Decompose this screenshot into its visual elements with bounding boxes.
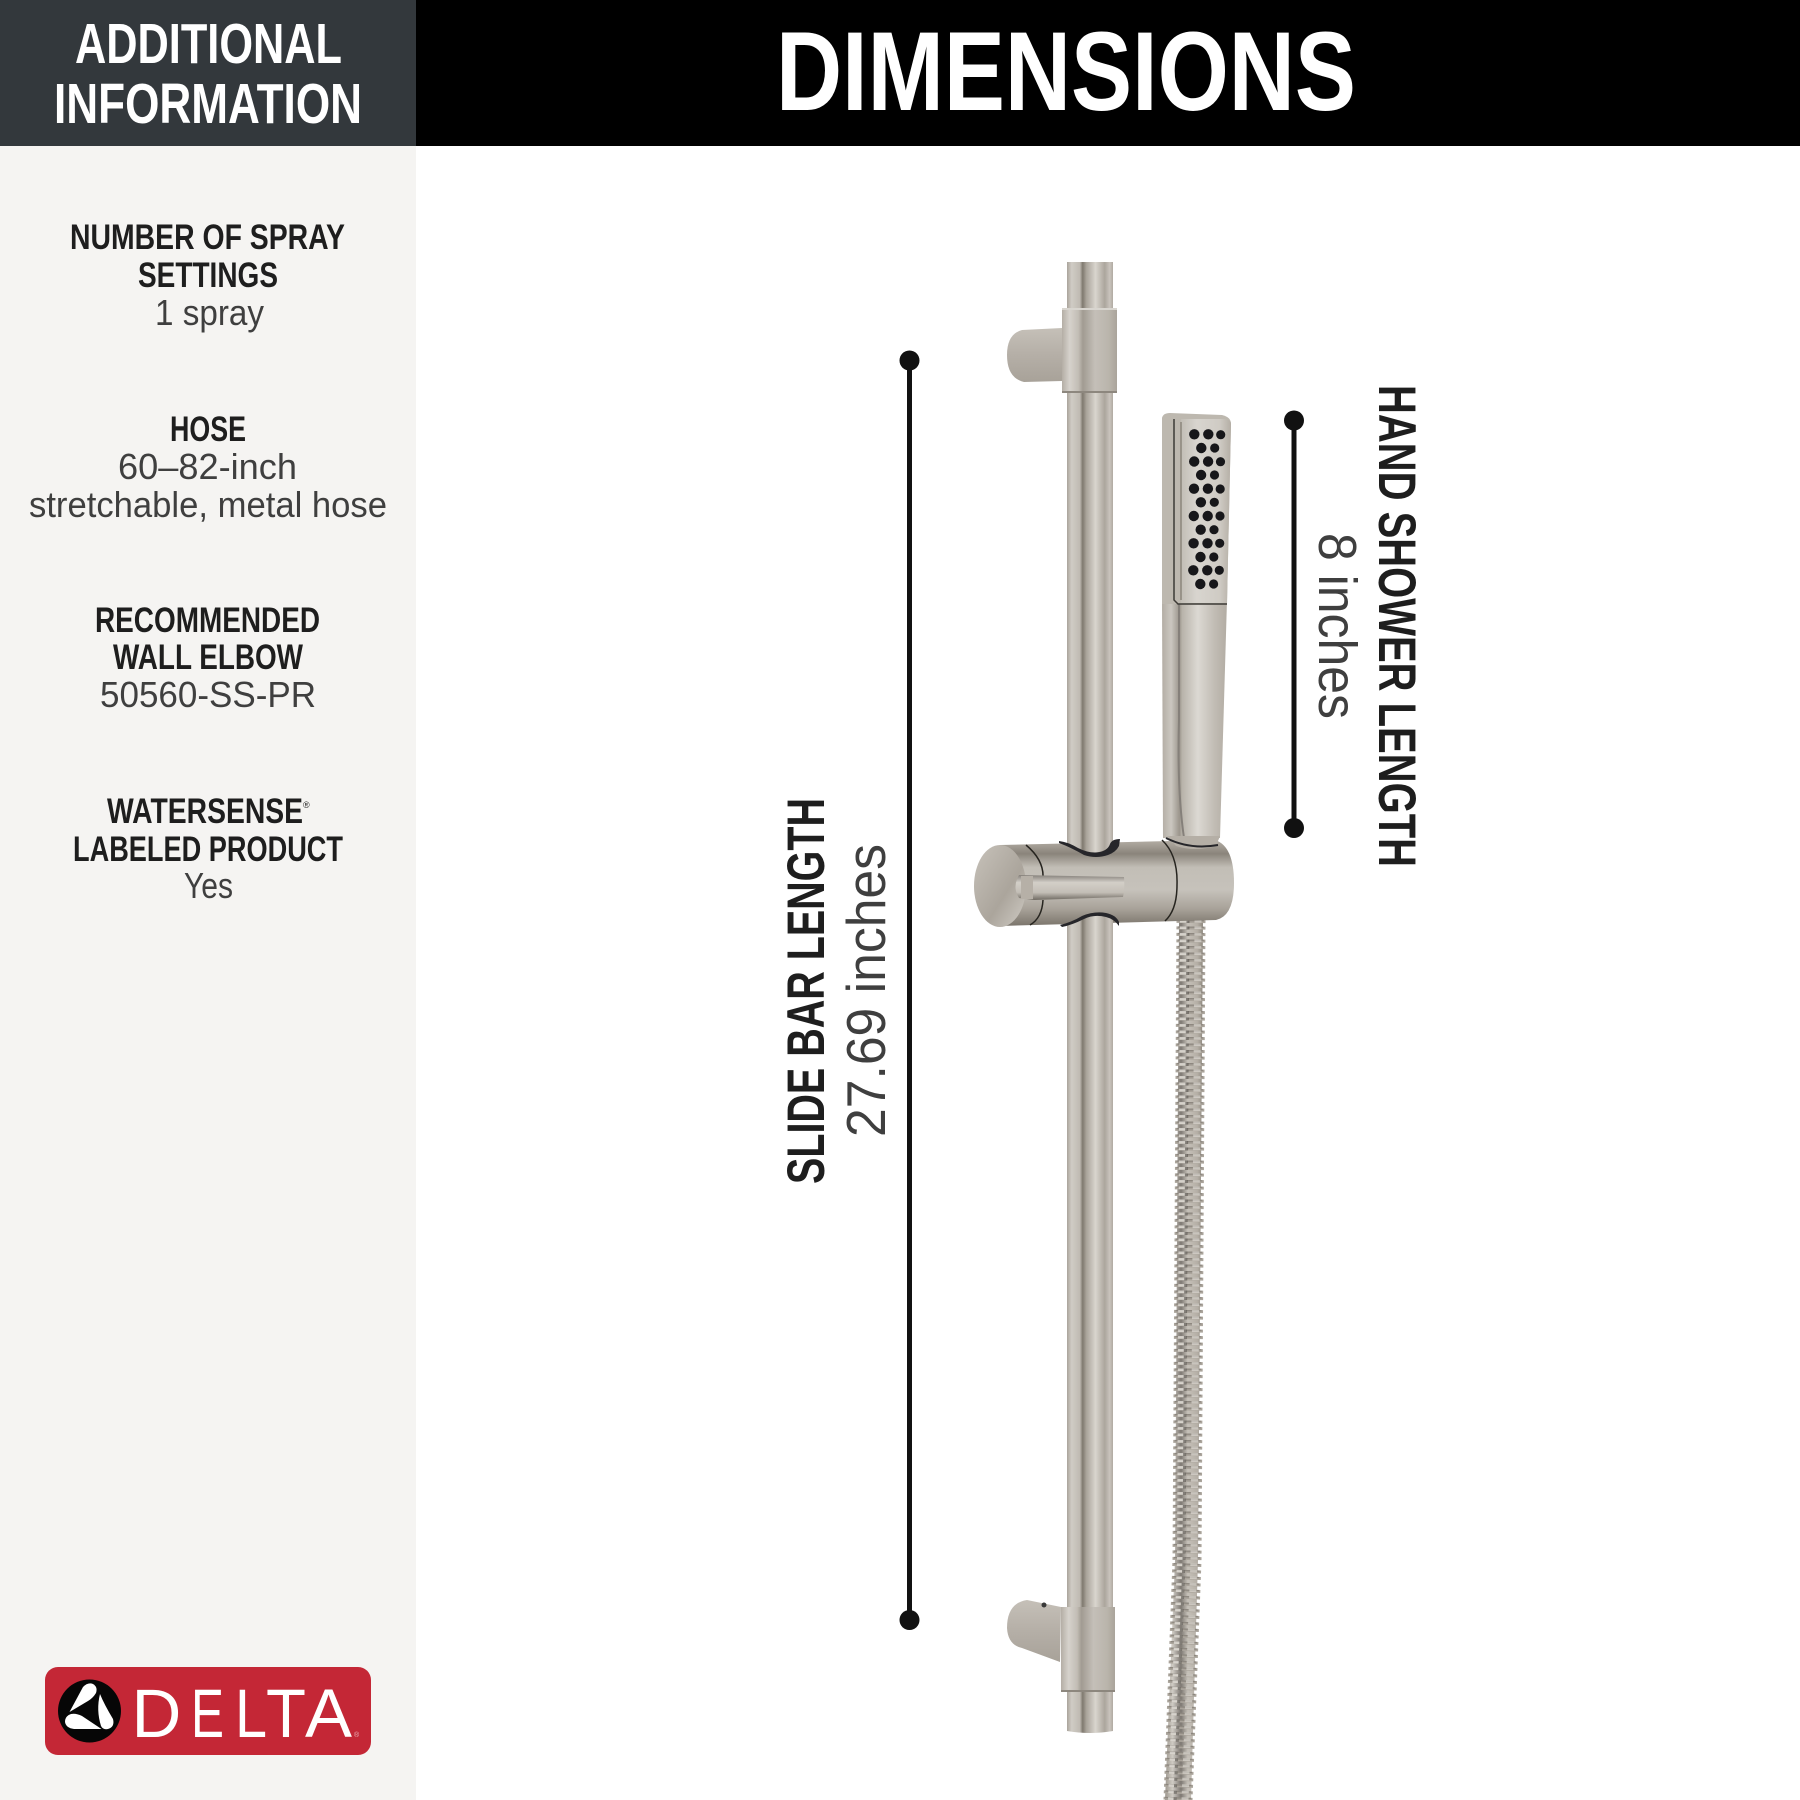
info block: hose	[29, 410, 387, 525]
product: upper wall bracket	[1007, 308, 1117, 393]
info block: watersense labeled product: Yes	[184, 865, 233, 906]
label: slide bar length: SLIDE BAR LENGTH	[777, 798, 836, 1184]
info block: recommended wall elbow: 50560-SS-PR	[100, 674, 316, 715]
product: metal hose	[1165, 920, 1203, 1800]
label: slide bar length: 27.69 inches	[835, 844, 897, 1137]
product: slide clamp	[974, 836, 1234, 928]
info block: recommended wall elbow	[95, 601, 320, 715]
info block: number of spray settings	[70, 218, 345, 333]
icon: spray nozzles	[1188, 429, 1225, 589]
panel: additional information sidebar	[0, 146, 416, 1800]
logo: delta: ®	[354, 1731, 360, 1739]
header: additional information	[0, 0, 416, 146]
logo: delta	[45, 1667, 371, 1755]
info block: number of spray settings: 1 spray	[155, 292, 264, 333]
logo: delta: T	[266, 1675, 306, 1752]
info block: hose: stretchable, metal hose	[29, 484, 387, 525]
dimension line: slide bar length	[900, 350, 920, 1630]
logo: delta: L	[235, 1675, 267, 1752]
info block: watersense labeled product: ®	[303, 800, 310, 810]
product: slide bar	[1067, 262, 1113, 1733]
info block: watersense labeled product: LABELED PRODUCT	[73, 830, 343, 869]
info block: recommended wall elbow: WALL ELBOW	[113, 638, 303, 677]
info block: hose: 60–82-inch	[118, 446, 297, 487]
header: additional information: ADDITIONAL	[75, 12, 342, 76]
header: additional information: INFORMATION	[54, 72, 362, 136]
label: hand shower length: 8 inches	[1307, 533, 1367, 719]
info block: watersense labeled product	[73, 792, 343, 906]
logo: delta: E	[191, 1675, 224, 1752]
product: hand shower	[1162, 413, 1231, 838]
label: hand shower length	[1307, 385, 1426, 867]
label: slide bar length	[777, 798, 897, 1184]
info block: recommended wall elbow: RECOMMENDED	[95, 601, 320, 640]
product: lower wall bracket	[1007, 1600, 1115, 1692]
info block: hose: HOSE	[170, 410, 246, 449]
info block: number of spray settings: SETTINGS	[138, 256, 278, 295]
info block: watersense labeled product: WATERSENSE	[107, 792, 303, 831]
logo: delta: A	[305, 1675, 352, 1752]
title: dimensions: DIMENSIONS	[776, 9, 1356, 134]
logo: delta: D	[132, 1675, 181, 1752]
info block: number of spray settings: NUMBER OF SPRAY	[70, 218, 345, 257]
label: hand shower length: HAND SHOWER LENGTH	[1367, 385, 1426, 867]
title: dimensions	[416, 0, 1800, 146]
dimension line: hand shower length	[1284, 410, 1304, 838]
